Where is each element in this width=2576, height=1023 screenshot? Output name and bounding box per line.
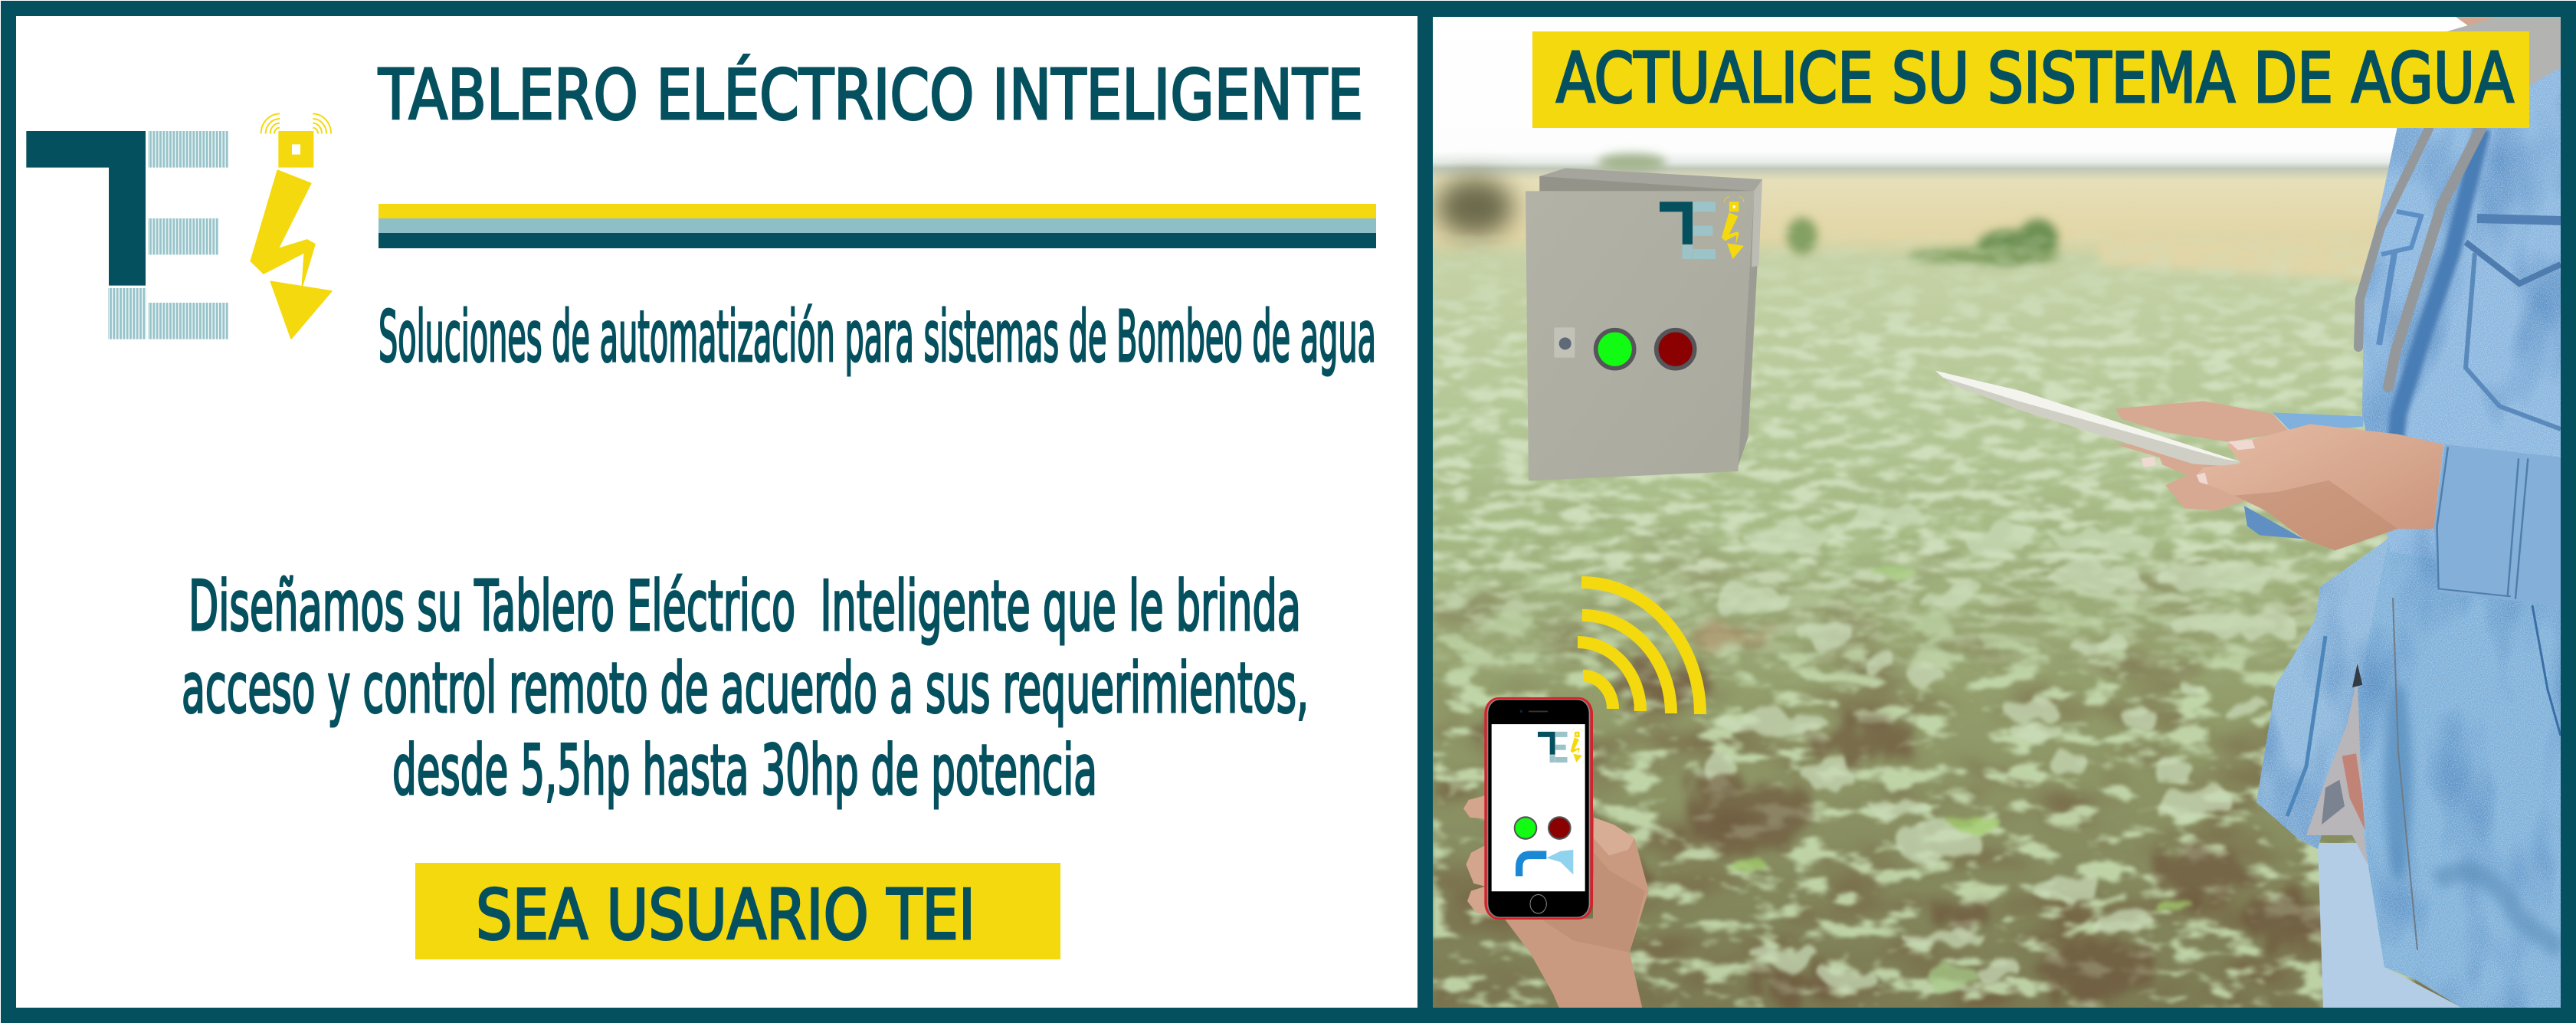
- hand palm: [1504, 818, 1649, 1008]
- far hand: [2116, 401, 2289, 511]
- neck and chin skin: [2456, 17, 2498, 26]
- panel: right photo of farm field: [1433, 17, 2561, 1008]
- jeans: [2318, 843, 2462, 1008]
- smartphone: [1484, 697, 1593, 920]
- hood grey lining: [2447, 17, 2561, 86]
- logo letter E stripes: [108, 131, 229, 339]
- phone water pipe icon: [1519, 850, 1573, 876]
- title: TABLERO ELÉCTRICO INTELIGENTE: [378, 54, 1363, 136]
- logo sensor square: [278, 131, 313, 168]
- hood strings: [2358, 129, 2481, 387]
- jacket upper torso: [2362, 67, 2561, 582]
- text block: description: acceso y control remoto de acuerdo a sus requerimientos,: [182, 648, 1309, 729]
- logo letter T: [26, 131, 146, 286]
- logo lightning bolt: [251, 170, 332, 339]
- phone screen: [1492, 724, 1585, 891]
- logo signal waves: [261, 113, 331, 133]
- jacket main lower: [2358, 529, 2561, 1008]
- phone screen logo: [1538, 729, 1582, 762]
- large chest pocket: [2477, 218, 2561, 221]
- sleeves and cuff: [2244, 412, 2561, 605]
- text block: description: [182, 566, 1309, 811]
- electrical cabinet: [1526, 168, 1762, 480]
- wifi signal arcs: [1578, 582, 1700, 714]
- red button: [1657, 330, 1695, 369]
- phone green button: [1515, 817, 1536, 839]
- photo: near crop leaves: [1433, 537, 2460, 1008]
- small chest pocket: [2381, 211, 2421, 254]
- cabinet logo: [1660, 197, 1744, 259]
- logo: TEI with lightning bolt: [26, 113, 332, 339]
- call to action button: SEA USUARIO TEI: [476, 875, 975, 956]
- tricolour stripes: [379, 204, 1376, 248]
- text block: description: desde 5,5hp hasta 30hp de potencia: [392, 730, 1097, 811]
- green button: [1596, 330, 1634, 369]
- phone body: [1484, 697, 1593, 920]
- cabinet front door: [1526, 191, 1754, 480]
- denim jacket body: [2256, 67, 2561, 1008]
- hand holding phone: [1463, 795, 1649, 1008]
- phone speaker and home button: [1529, 710, 1548, 712]
- near hand: [2142, 424, 2443, 550]
- photo: crop leaves hand-placed: [1705, 508, 2302, 991]
- cabinet latch: [1554, 327, 1575, 358]
- plaid shirt: [2306, 664, 2368, 864]
- photo: distant trees and bushes: [1437, 153, 2391, 282]
- panel: left white information panel: [16, 16, 1417, 1008]
- photo: soil patches: [1433, 513, 2322, 1008]
- photo: far crop leaves: [1433, 232, 2388, 675]
- text block: description: Diseñamos su Tablero Eléctrico Inteligente que le brinda: [188, 566, 1301, 647]
- phone red button: [1549, 817, 1571, 839]
- cabinet lid and side: [1539, 168, 1762, 191]
- photo: soil hand-placed: [1467, 625, 2326, 1004]
- denim shadows and stitching: [2287, 129, 2561, 950]
- tablet: [1935, 371, 2240, 467]
- photo: woman in denim holding tablet: [1935, 17, 2561, 1008]
- jacket lower flap: [2256, 535, 2394, 861]
- fingers: [1463, 795, 1486, 914]
- photo: sky, horizon and field base: [1433, 154, 2462, 1008]
